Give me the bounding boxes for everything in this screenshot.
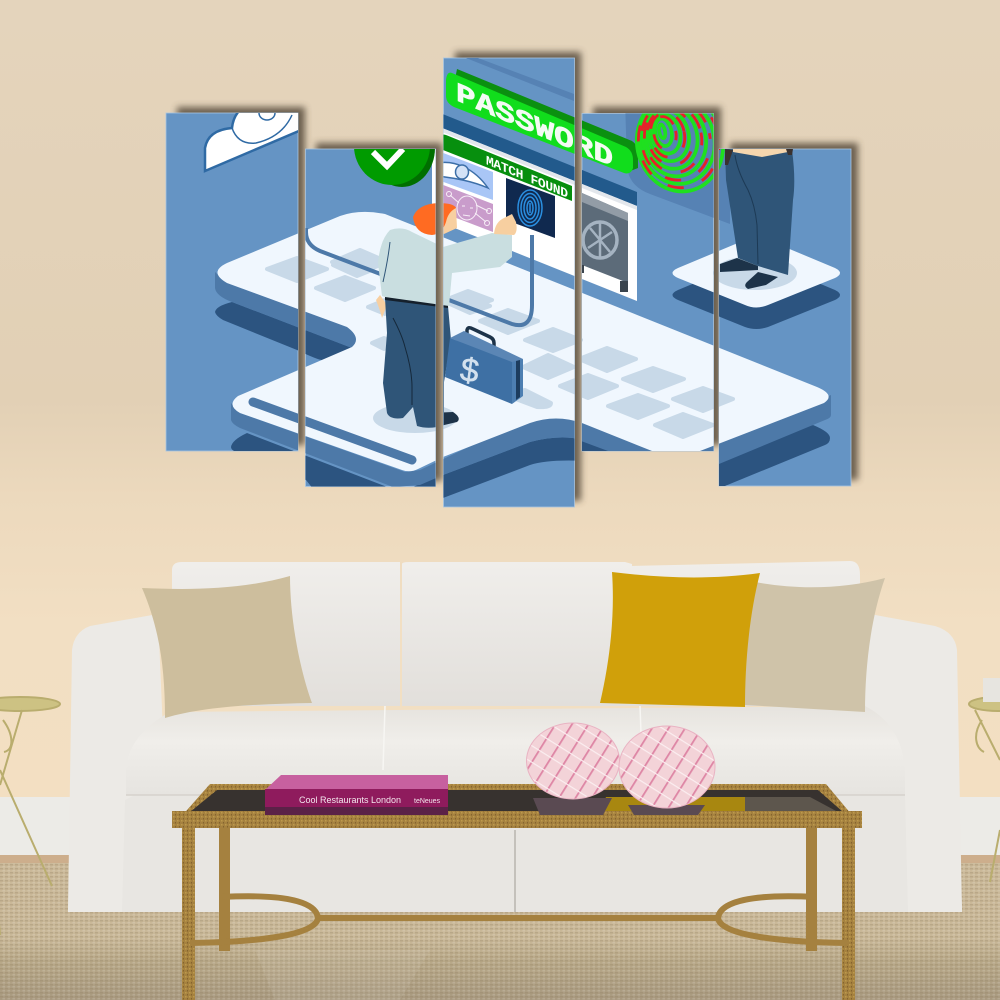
shirt (378, 228, 512, 306)
face (436, 208, 457, 234)
book top (265, 775, 448, 790)
icon: eye cloud (204, 113, 298, 173)
book title: Cool Restaurants London (299, 795, 401, 805)
briefcase (445, 328, 523, 404)
briefcase top (450, 331, 523, 364)
match found bar (436, 135, 572, 203)
book cover (265, 789, 448, 807)
check mark (373, 149, 403, 166)
platform top (218, 212, 829, 471)
trousers (383, 298, 451, 428)
panel 4 (582, 114, 714, 451)
sofa skirt (68, 780, 962, 912)
icon: eye (438, 162, 488, 188)
table front rail (172, 811, 862, 828)
vases (526, 723, 715, 815)
panel 5 (719, 149, 851, 486)
man with briefcase (373, 203, 517, 433)
coffee table (172, 784, 862, 1000)
platform groove (253, 402, 412, 460)
book (265, 775, 448, 815)
briefcase side (512, 359, 523, 404)
sofa (68, 561, 962, 912)
briefcase handle (467, 328, 494, 349)
navy header stripe (444, 114, 637, 206)
safe feet (582, 265, 628, 292)
sign backing (452, 69, 638, 172)
panel 2 (306, 149, 436, 486)
small platform shadow (672, 284, 840, 329)
shoe (430, 412, 459, 427)
panel 3 (444, 58, 574, 507)
icon: blue fingerprint (518, 190, 542, 226)
dollar sign: $ (458, 350, 481, 389)
face tile (444, 185, 493, 232)
icon: green check badge (354, 149, 435, 187)
panel 1 (166, 113, 298, 451)
back arm hand (376, 295, 387, 318)
sofa right arm (862, 614, 962, 912)
wall shade panel (625, 114, 730, 224)
shirt fold (383, 242, 390, 282)
vase left (526, 723, 620, 799)
screen panel (432, 124, 637, 301)
table glass top (172, 784, 862, 827)
platform side band (215, 272, 831, 487)
platform shadow (215, 302, 830, 510)
briefcase front (445, 338, 512, 404)
panel: canvas backgrounds (166, 58, 851, 507)
pillow right (745, 578, 885, 712)
wall background (0, 0, 1000, 800)
pillow reflection (600, 797, 745, 812)
fingerprint tile (506, 178, 555, 238)
side table left (0, 697, 60, 935)
icon: large fingerprint (634, 114, 725, 194)
standing man right legs (720, 148, 794, 289)
sign face (446, 73, 633, 173)
pointing hand (494, 214, 517, 235)
hair (413, 203, 456, 235)
trousers (725, 149, 794, 275)
canvas shadows (177, 52, 858, 501)
trouser crease (735, 155, 758, 264)
book reflection (265, 807, 448, 815)
eye tile (444, 153, 493, 200)
sofa left arm (68, 614, 165, 912)
canvas artwork (205, 58, 840, 510)
trouser crease (393, 318, 412, 405)
pillow mustard (600, 572, 760, 707)
baseboard (0, 797, 1000, 863)
icon: face network (446, 192, 492, 226)
belt (725, 149, 793, 165)
sofa seat (126, 706, 905, 912)
sofa back cushions (172, 561, 860, 706)
green password sign (446, 69, 638, 175)
cable (306, 228, 532, 325)
table front legs (182, 828, 855, 1000)
screen body (432, 124, 637, 301)
table stretcher (190, 896, 848, 943)
small platform top (672, 238, 840, 308)
belt (385, 296, 448, 308)
screen top strip (444, 128, 637, 210)
floor shadow (713, 256, 797, 290)
match found label: MATCH FOUND (486, 154, 568, 203)
shoes (720, 258, 778, 289)
book publisher: teNeues (414, 798, 441, 805)
eye pupil (258, 113, 276, 121)
wall stripe (466, 58, 574, 101)
safe wheel (583, 222, 617, 258)
table back legs (219, 826, 817, 951)
keyboard keys (267, 250, 733, 437)
keyboard platform (215, 212, 831, 510)
vase right (619, 726, 715, 808)
small platform (672, 238, 840, 329)
floor shadow (373, 403, 457, 433)
waistline (733, 148, 788, 157)
vase reflections (533, 798, 705, 815)
password label: PASSWORD (456, 79, 613, 175)
side table right (969, 678, 1000, 882)
carpet (0, 863, 1000, 1000)
pillow left (142, 576, 312, 718)
safe top (582, 193, 628, 221)
safe (582, 193, 628, 292)
